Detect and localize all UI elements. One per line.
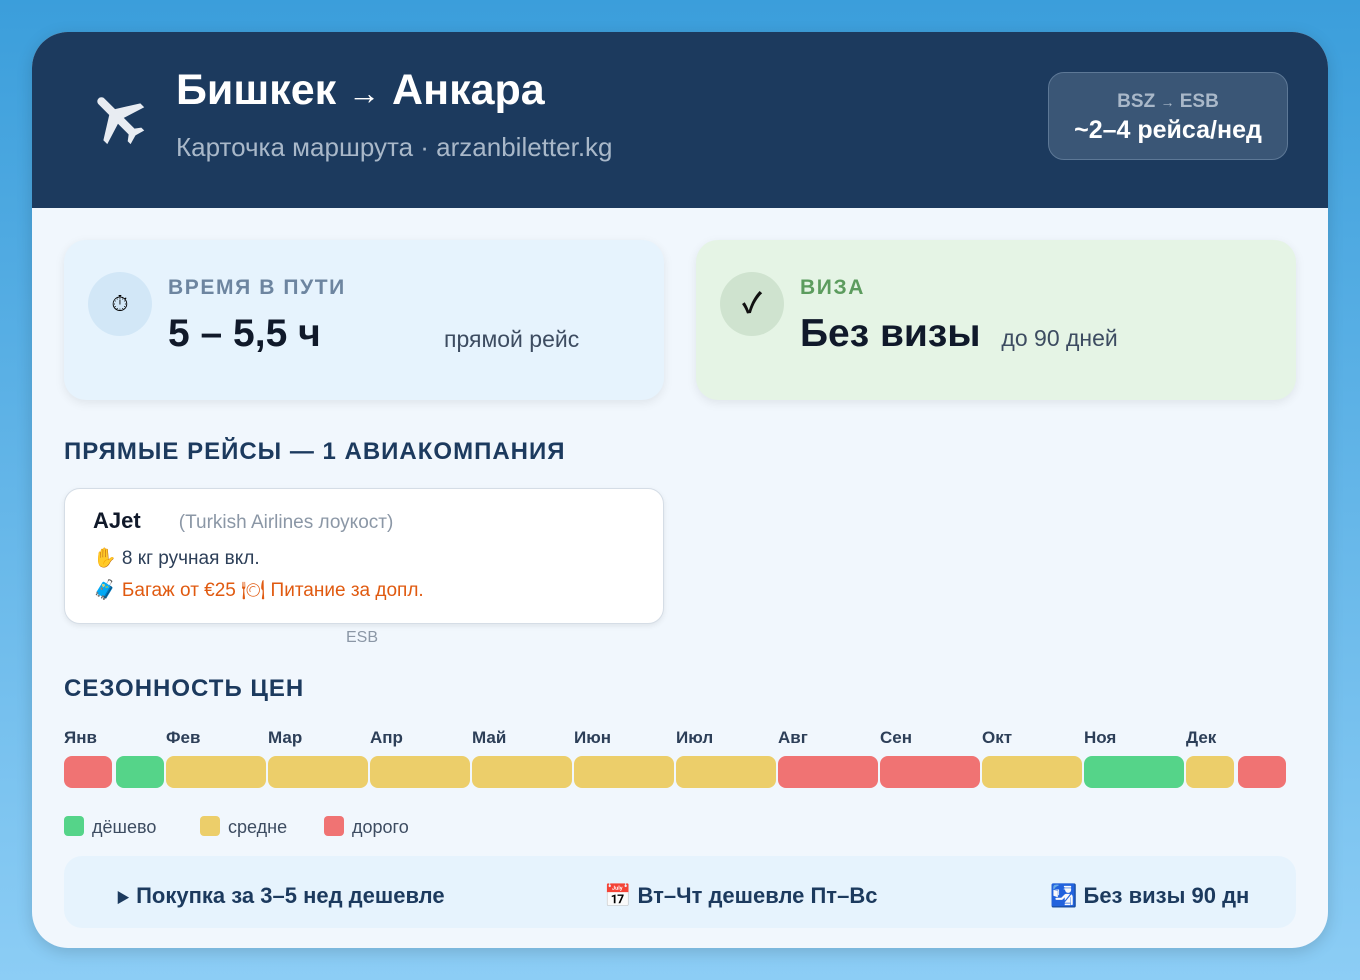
legend: средне	[228, 817, 287, 837]
title: Бишкек → Анкара	[176, 66, 545, 114]
badge: frequency	[1048, 72, 1288, 160]
icon: check: ✓	[742, 288, 762, 319]
tips bar	[64, 856, 1296, 928]
label: ВРЕМЯ В ПУТИ	[168, 276, 346, 299]
icon: check	[720, 272, 784, 336]
hand luggage: ✋ 8 кг ручная вкл.	[93, 548, 260, 569]
heading: direct flights: ПРЯМЫЕ РЕЙСЫ — 1 АВИАКОМПАНИЯ	[64, 438, 566, 465]
chart: seasonality: Фев	[166, 728, 200, 747]
subtitle: Карточка маршрута · arzanbiletter.kg	[176, 132, 613, 162]
icon: stopwatch: ⏱	[111, 291, 129, 316]
icon: plane	[97, 97, 144, 144]
value: 5 – 5,5 ч	[168, 312, 321, 355]
legend: дорого	[352, 817, 409, 837]
baggage: 🧳 Багаж от €25 🍽 Питание за допл.	[93, 580, 424, 601]
panel: travel time	[64, 240, 664, 400]
airline card	[64, 488, 664, 624]
chart: seasonality: Май	[472, 728, 506, 747]
badge: frequency: ~2–4 рейса/нед	[1074, 116, 1262, 144]
badge: frequency: BSZ → ESB	[1117, 91, 1219, 112]
panel: visa	[696, 240, 1296, 400]
chart: seasonality: Авг	[778, 728, 808, 747]
chart: seasonality	[64, 728, 1286, 788]
chart: seasonality: Апр	[370, 728, 403, 747]
airline name: AJet (Turkish Airlines лоукост)	[93, 508, 393, 533]
legend	[64, 816, 409, 837]
chart: seasonality: Дек	[1186, 728, 1216, 747]
tip: days: 📅 Вт–Чт дешевле Пт–Вс	[604, 883, 877, 908]
icon: stopwatch	[88, 272, 152, 336]
chart: seasonality: Окт	[982, 728, 1012, 747]
chart: seasonality: Мар	[268, 728, 302, 747]
header	[32, 32, 1328, 208]
chart: seasonality: Сен	[880, 728, 912, 747]
heading: seasonality: СЕЗОННОСТЬ ЦЕН	[64, 675, 304, 702]
chart: seasonality: Июл	[676, 728, 713, 747]
chart: seasonality: Июн	[574, 728, 611, 747]
chart: seasonality: Янв	[64, 728, 97, 747]
legend: дёшево	[92, 817, 156, 837]
tip: visa: 🛂 Без визы 90 дн	[1050, 883, 1249, 908]
label: ВИЗА	[800, 276, 865, 299]
chart: seasonality: Ноя	[1084, 728, 1116, 747]
tip: purchase: ▶ Покупка за 3–5 нед дешевле	[116, 883, 445, 908]
value: Без визы до 90 дней	[800, 312, 1118, 355]
note: прямой рейс	[444, 326, 579, 352]
airport label: ESB	[346, 629, 378, 646]
